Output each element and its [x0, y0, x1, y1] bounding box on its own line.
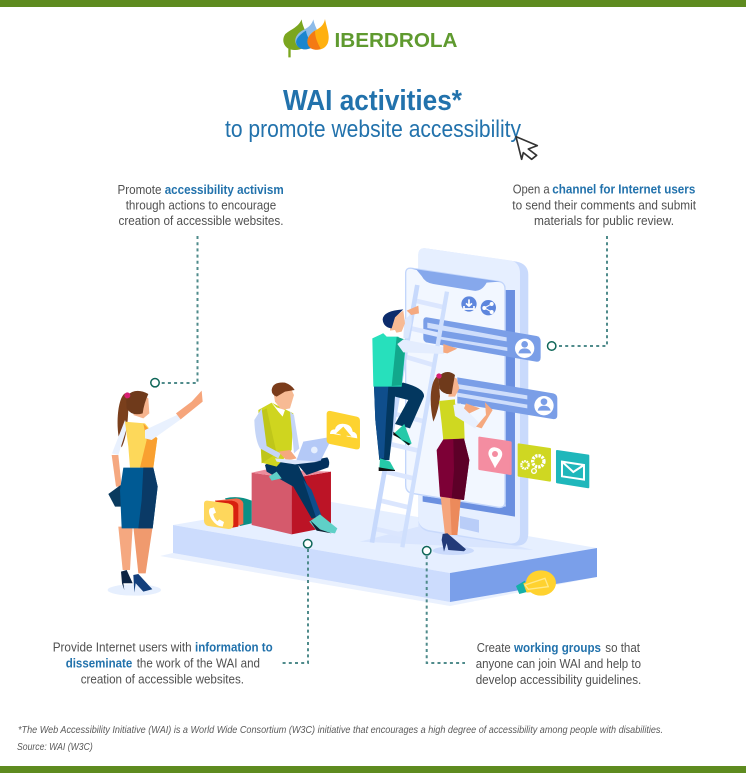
icon: light bulb [516, 570, 556, 596]
icon: location pin [479, 438, 511, 474]
text: working groups: anyone can join WAI and help to [476, 656, 641, 671]
message bar 1 [423, 317, 541, 362]
person: woman pointing [108, 391, 203, 596]
text: channel for Internet users [512, 182, 696, 228]
icon: mail [557, 451, 588, 487]
phone home button [460, 516, 479, 533]
logo: Iberdrola [283, 19, 458, 57]
connector: accessibility activism [151, 236, 198, 387]
icon: mouse cursor [516, 137, 537, 159]
phone notch [412, 269, 500, 291]
text: channel for Internet users: channel for Internet users [552, 182, 695, 196]
text: information to disseminate [53, 640, 273, 687]
footnote: *The Web Accessibility Initiative (WAI) is a World Wide Consortium (W3C) initiative that encourages a high degree of accessibility among people with disabilities. [18, 724, 663, 736]
phone [360, 248, 588, 555]
text: working groups: Create [477, 640, 511, 655]
text: information to disseminate: the work of the WAI and [137, 656, 260, 671]
text: accessibility activism: accessibility activism [165, 182, 284, 197]
text: accessibility activism: Promote [118, 182, 162, 197]
icon: gears [519, 444, 550, 481]
icon: leaf and drops [283, 19, 329, 57]
text: information to disseminate: Provide Internet users with [53, 640, 192, 655]
text: working groups [476, 640, 641, 687]
phone screen band [423, 290, 515, 517]
icon: download [461, 296, 477, 312]
text: accessibility activism [118, 182, 284, 228]
text: channel for Internet users: to send their comments and submit [512, 198, 696, 212]
connector: working groups [422, 546, 465, 663]
phone shadow [360, 522, 533, 550]
text: information to disseminate: disseminate [66, 656, 132, 671]
platform [160, 500, 607, 606]
source: Source: WAI (W3C) [17, 741, 93, 753]
connector: information to disseminate [282, 540, 312, 663]
text: working groups: develop accessibility guidelines. [476, 672, 641, 687]
text: working groups: so that [605, 640, 640, 655]
bottom green bar [0, 766, 746, 773]
top green bar [0, 0, 746, 7]
text: channel for Internet users: Open a [513, 182, 550, 196]
text: accessibility activism: creation of accessible websites. [118, 213, 284, 228]
person: man climbing ladder [372, 306, 457, 471]
phone body [418, 248, 528, 546]
ladder [372, 285, 447, 547]
text: working groups: working groups [513, 640, 601, 655]
logo wordmark: IBERDROLA [334, 30, 458, 52]
person: woman at phone [431, 372, 493, 555]
phone screen [406, 268, 505, 507]
icon stack: phone cards [204, 497, 252, 529]
cube seat [252, 469, 331, 534]
left figures and objects [108, 383, 360, 596]
icon: cloud upload [327, 411, 360, 449]
connector: channel for Internet users [548, 236, 607, 350]
message bar 2 [457, 377, 557, 419]
text: accessibility activism: through actions to encourage [126, 198, 276, 212]
text: information to disseminate: information to [195, 640, 273, 655]
person: man with laptop [254, 383, 337, 533]
icon: share [481, 300, 496, 315]
title: WAI activities* [283, 85, 463, 117]
text: channel for Internet users: materials for public review. [534, 213, 674, 228]
subtitle: to promote website accessibility [225, 116, 521, 143]
text: information to disseminate: creation of accessible websites. [81, 672, 244, 687]
